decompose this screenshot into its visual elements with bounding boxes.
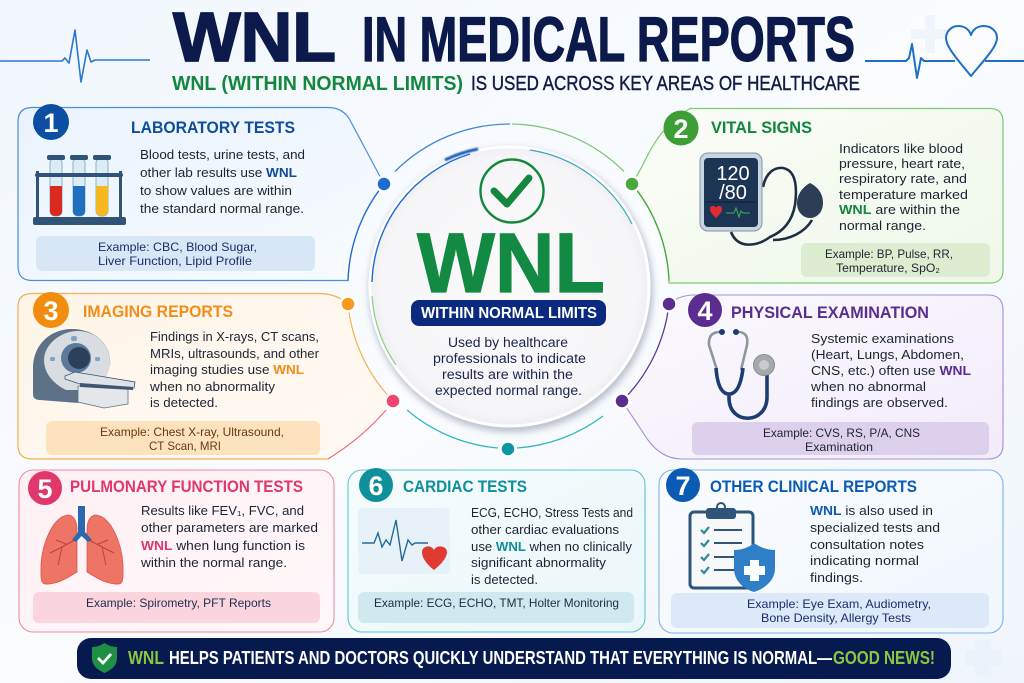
- body text: Blood tests, urine tests, and: [140, 147, 305, 162]
- body text: other lab results use WNL: [140, 165, 297, 180]
- badge 1: 1: [43, 108, 59, 138]
- outer ring arcs: [348, 124, 669, 448]
- icon: blood pressure monitor: 120: [716, 163, 750, 185]
- example box: [36, 236, 315, 271]
- central description: Used by healthcare: [448, 335, 568, 350]
- icon: right ECG line with heart: [865, 26, 1024, 78]
- body text: normal range.: [839, 218, 926, 233]
- body text: when no abnormal: [810, 379, 926, 394]
- badge 4: [688, 293, 722, 327]
- body text: when no abnormality: [149, 379, 276, 394]
- example box: Example: Eye Exam, Audiometry,: [747, 597, 931, 611]
- title: WNL: [173, 0, 336, 76]
- panel: 4 physical examination: [622, 293, 1003, 459]
- banner text: WNL: [128, 647, 164, 668]
- body text: consultation notes: [810, 537, 925, 552]
- example box: [692, 422, 989, 455]
- badge 5: [28, 471, 62, 505]
- badge 6: [359, 468, 393, 502]
- example box: Examination: [805, 440, 873, 454]
- example box: Example: ECG, ECHO, TMT, Holter Monitoring: [374, 596, 619, 610]
- example box: Example: Spirometry, PFT Reports: [86, 596, 271, 610]
- central description: [433, 335, 586, 398]
- body text: CNS, etc.) often use WNL: [811, 363, 971, 378]
- icon: CT scanner: [33, 329, 135, 408]
- example box: Example: Chest X-ray, Ultrasound,: [100, 425, 284, 439]
- example box: [46, 421, 320, 455]
- body text: [471, 505, 633, 587]
- body text: Findings in X-rays, CT scans,: [150, 329, 319, 344]
- example box: Example: CBC, Blood Sugar,: [98, 240, 257, 254]
- example box: Example: BP, Pulse, RR,: [825, 247, 953, 261]
- body text: the standard normal range.: [140, 201, 304, 216]
- banner text: GOOD NEWS!: [833, 647, 935, 668]
- body text: [810, 331, 971, 410]
- body text: Systemic examinations: [811, 331, 955, 346]
- body text: [140, 503, 318, 570]
- title: [173, 0, 855, 76]
- example box: [33, 592, 320, 623]
- heading: IMAGING REPORTS: [83, 303, 233, 321]
- example box: Bone Density, Allergy Tests: [761, 611, 911, 625]
- icon: clipboard and shield: [690, 503, 775, 592]
- central description: professionals to indicate: [433, 351, 586, 366]
- heading: LABORATORY TESTS: [131, 119, 295, 137]
- example box: [801, 243, 990, 277]
- body text: within the normal range.: [140, 555, 287, 570]
- body text: imaging studies use WNL: [150, 362, 304, 377]
- pill: within normal limits: [411, 300, 606, 326]
- body text: WNL are within the: [839, 202, 960, 217]
- badge 2: 2: [673, 114, 689, 144]
- body text: WNL when lung function is: [141, 538, 306, 553]
- body text: (Heart, Lungs, Abdomen,: [811, 347, 964, 362]
- panel: 5 pulmonary function tests: [19, 470, 334, 632]
- icon: shield: [92, 643, 117, 673]
- body text: temperature marked: [839, 187, 968, 202]
- example box: Liver Function, Lipid Profile: [98, 254, 252, 268]
- subtitle: IS USED ACROSS KEY AREAS OF HEALTHCARE: [471, 72, 860, 95]
- body text: use WNL when no clinically: [471, 539, 632, 554]
- panel: 2 vital signs: [632, 108, 1003, 283]
- body text: [140, 147, 305, 216]
- body text: findings are observed.: [811, 395, 948, 410]
- panel: 3 imaging reports: [18, 292, 393, 459]
- icon: blood pressure monitor: [700, 153, 823, 245]
- badge 1: [33, 104, 69, 140]
- body text: [149, 329, 320, 410]
- icon: lungs: [41, 506, 123, 584]
- big WNL: WNL: [417, 216, 605, 310]
- badge 7: 7: [675, 471, 691, 501]
- body text: pressure, heart rate,: [839, 156, 965, 171]
- example box: Example: CVS, RS, P/A, CNS: [763, 426, 920, 440]
- heading: PULMONARY FUNCTION TESTS: [70, 478, 303, 496]
- banner text: HELPS PATIENTS AND DOCTORS QUICKLY UNDERSTAND THAT EVERYTHING IS NORMAL—: [169, 647, 832, 668]
- badge 6: 6: [368, 471, 384, 501]
- icon: ECG chart with heart: [358, 508, 450, 574]
- badge 3: [33, 292, 69, 328]
- panel: 7 other clinical reports: [659, 468, 1003, 633]
- body text: is detected.: [471, 572, 538, 587]
- central circle: [368, 146, 653, 432]
- example box: CT Scan, MRI: [149, 439, 221, 453]
- badge 4: 4: [697, 296, 713, 326]
- icon: test tubes: [33, 155, 126, 225]
- central description: results are within the: [442, 367, 573, 382]
- bottom banner: [77, 638, 951, 679]
- body text: MRIs, ultrasounds, and other: [150, 346, 320, 361]
- connector dots: [340, 176, 676, 456]
- body text: respiratory rate, and: [839, 171, 967, 186]
- body text: WNL is also used in: [810, 503, 933, 518]
- body text: is detected.: [150, 395, 218, 410]
- badge 5: 5: [37, 474, 53, 504]
- example box: [671, 593, 989, 628]
- body text: significant abnormality: [471, 555, 607, 570]
- subtitle: [172, 72, 860, 95]
- badge 3: 3: [43, 296, 59, 326]
- central description: expected normal range.: [435, 383, 582, 398]
- heading: VITAL SIGNS: [711, 119, 812, 137]
- body text: other cardiac evaluations: [471, 522, 620, 537]
- badge 2: [664, 110, 698, 146]
- heading: PHYSICAL EXAMINATION: [731, 304, 929, 322]
- body text: other parameters are marked: [141, 520, 318, 535]
- body text: specialized tests and: [810, 520, 940, 535]
- heading: CARDIAC TESTS: [403, 478, 527, 496]
- icon: check mark: [480, 160, 544, 222]
- body text: findings.: [810, 570, 863, 585]
- body text: Results like FEV₁, FVC, and: [141, 503, 304, 518]
- body text: indicating normal: [810, 553, 919, 568]
- body text: Indicators like blood: [839, 141, 963, 156]
- icon: stethoscope: [709, 329, 774, 418]
- body text: ECG, ECHO, Stress Tests and: [471, 505, 633, 520]
- example box: [358, 592, 634, 623]
- subtitle: WNL (WITHIN NORMAL LIMITS): [172, 72, 463, 95]
- example box: Temperature, SpO₂: [836, 261, 940, 275]
- panel: 1 laboratory tests: [18, 104, 384, 280]
- body text: [839, 141, 968, 233]
- heading: OTHER CLINICAL REPORTS: [710, 478, 917, 496]
- icon: left ECG line: [0, 30, 150, 82]
- icon: blood pressure monitor: /80: [719, 182, 747, 204]
- body text: [810, 503, 940, 585]
- pill: within normal limits: WITHIN NORMAL LIMITS: [421, 305, 597, 322]
- badge 7: [666, 468, 700, 502]
- panel: 6 cardiac tests: [348, 468, 645, 632]
- body text: to show values are within: [140, 183, 292, 198]
